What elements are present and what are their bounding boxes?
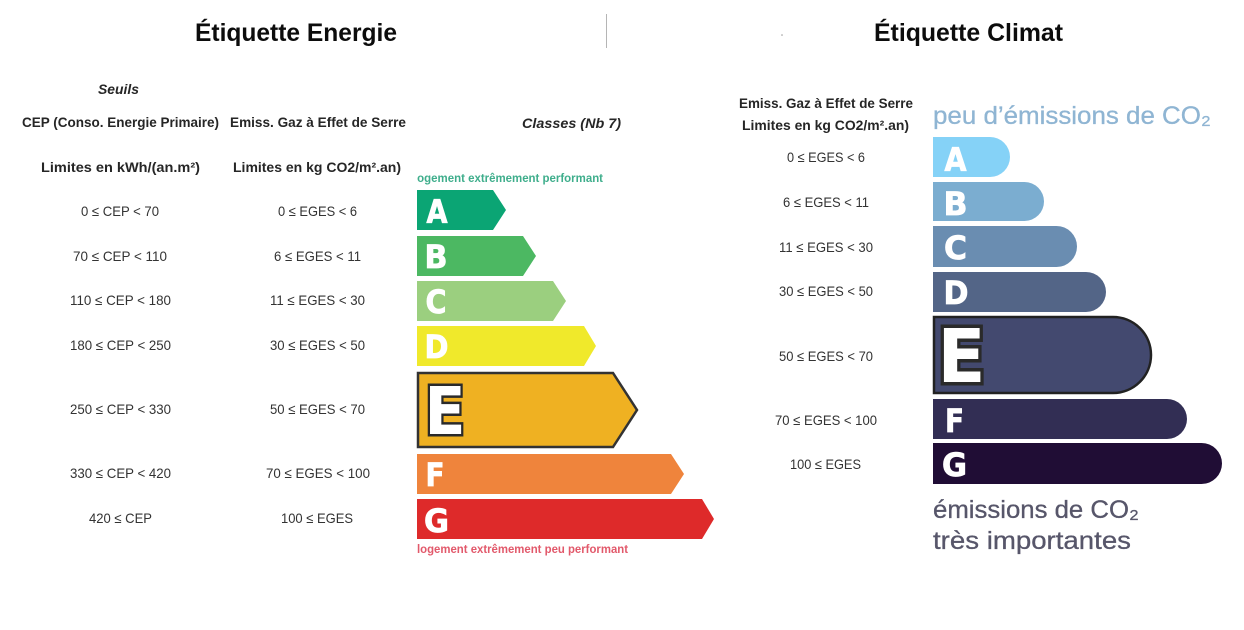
column values: climate EGES limits: 50 ≤ EGES < 70 xyxy=(779,348,873,364)
arrow: class G: G xyxy=(424,502,449,540)
column values: EGES limits: 50 ≤ EGES < 70 xyxy=(270,401,365,417)
column header: EGES xyxy=(230,114,406,175)
bar: class F: F xyxy=(945,402,964,440)
bar: class D: D xyxy=(944,274,968,312)
arrow: class E highlighted: E xyxy=(424,373,466,450)
bar: class C xyxy=(933,226,1077,267)
bar: class G: G xyxy=(942,446,967,484)
caption: high emissions: émissions de CO₂ xyxy=(933,496,1139,524)
bar: class E highlighted xyxy=(934,314,1151,400)
column header: CEP xyxy=(22,114,219,175)
arrow: class C: C xyxy=(426,283,446,321)
column header: EGES: Emiss. Gaz à Effet de Serre xyxy=(230,114,406,130)
column values: EGES limits: 70 ≤ EGES < 100 xyxy=(266,465,370,481)
column values: EGES limits: 0 ≤ EGES < 6 xyxy=(278,203,357,219)
column values: EGES limits: 6 ≤ EGES < 11 xyxy=(274,248,361,264)
column header: EGES climate: Emiss. Gaz à Effet de Serre xyxy=(739,95,913,111)
column values: EGES limits: 11 ≤ EGES < 30 xyxy=(270,292,365,308)
column values: climate EGES limits: 6 ≤ EGES < 11 xyxy=(783,194,869,210)
column header: CEP: CEP (Conso. Energie Primaire) xyxy=(22,114,219,130)
arrow: class F xyxy=(417,454,684,494)
column values: CEP limits: 250 ≤ CEP < 330 xyxy=(70,401,171,417)
bar: class F xyxy=(933,399,1187,440)
bar: class B: B xyxy=(944,185,968,223)
panel: climate thresholds table xyxy=(739,95,913,472)
arrow: class A xyxy=(417,190,506,231)
arrow: class A: A xyxy=(426,193,448,231)
bar: class C: C xyxy=(944,229,967,267)
column values: CEP limits: 330 ≤ CEP < 420 xyxy=(70,465,171,481)
heading: Seuils: Seuils xyxy=(98,81,139,97)
bar: class B xyxy=(933,182,1044,223)
column values: EGES limits: 30 ≤ EGES < 50 xyxy=(270,337,365,353)
column values: CEP limits: 110 ≤ CEP < 180 xyxy=(70,292,171,308)
column values: CEP limits xyxy=(70,203,171,526)
bar: class D xyxy=(933,272,1106,312)
column values: climate EGES limits: 70 ≤ EGES < 100 xyxy=(775,412,877,428)
column header: EGES climate xyxy=(739,95,913,133)
column values: climate EGES limits: 0 ≤ EGES < 6 xyxy=(787,149,865,165)
arrow: class F: F xyxy=(426,456,444,494)
column values: climate EGES limits xyxy=(775,149,877,472)
column values: EGES limits xyxy=(266,203,370,526)
arrow: class C xyxy=(417,281,566,321)
panel: energy classes xyxy=(414,115,714,556)
column header: EGES climate: Limites en kg CO2/m².an) xyxy=(742,117,909,133)
title: Étiquette Energie: Étiquette Energie xyxy=(195,18,397,47)
panel: climate classes xyxy=(933,102,1222,555)
column header: EGES: Limites en kg CO2/m².an) xyxy=(233,159,401,175)
caption: bottom of scale: logement extrêmement peu performant xyxy=(417,544,628,556)
bar: class A xyxy=(933,137,1010,179)
arrow: class D xyxy=(417,326,596,366)
column values: CEP limits: 420 ≤ CEP xyxy=(89,510,152,526)
column values: CEP limits: 70 ≤ CEP < 110 xyxy=(73,248,167,264)
arrow: class B: B xyxy=(424,238,448,276)
caption: high emissions xyxy=(933,496,1139,555)
arrow: class G xyxy=(417,499,714,540)
column values: CEP limits: 180 ≤ CEP < 250 xyxy=(70,337,171,353)
column values: climate EGES limits: 30 ≤ EGES < 50 xyxy=(779,283,873,299)
column header: CEP: Limites en kWh/(an.m²) xyxy=(41,159,200,175)
bar: class E highlighted: E xyxy=(938,314,986,400)
arrow: class B xyxy=(417,236,536,276)
bar: class A: A xyxy=(944,141,967,179)
column values: EGES limits: 100 ≤ EGES xyxy=(281,510,353,526)
caption: top of scale: logement extrêmement performant xyxy=(414,173,603,185)
caption: low emissions: peu d’émissions de CO₂ xyxy=(933,102,1211,130)
caption: high emissions: très importantes xyxy=(933,527,1131,555)
column values: climate EGES limits: 11 ≤ EGES < 30 xyxy=(779,239,873,255)
bar: class G xyxy=(933,443,1222,484)
arrow: class E highlighted xyxy=(418,373,637,450)
arrow: class D: D xyxy=(424,328,448,366)
title: Étiquette Climat: Étiquette Climat xyxy=(874,18,1064,47)
heading: Classes: Classes (Nb 7) xyxy=(522,115,621,131)
column values: CEP limits: 0 ≤ CEP < 70 xyxy=(81,203,159,219)
column values: climate EGES limits: 100 ≤ EGES xyxy=(790,456,861,472)
panel: energy thresholds table xyxy=(22,81,406,526)
